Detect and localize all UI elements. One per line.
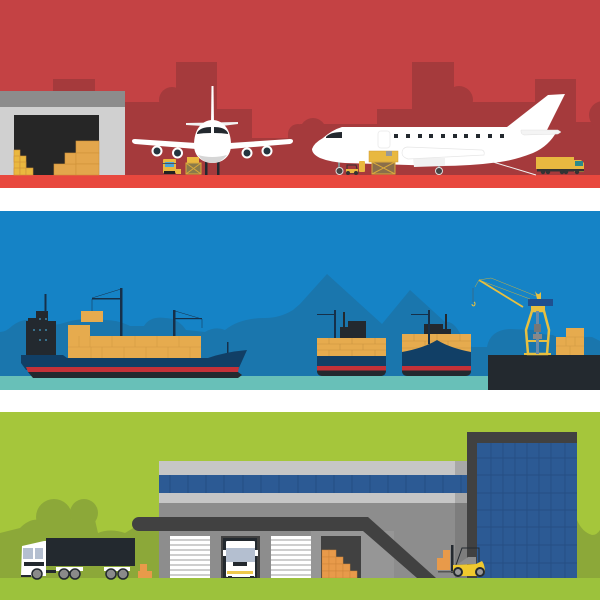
shutter door left [170, 536, 210, 578]
loading bay with truck [221, 536, 260, 579]
yellow delivery truck [536, 157, 584, 174]
ship cranes [92, 288, 202, 336]
canopy ramp [132, 517, 436, 578]
green bushes [0, 499, 600, 578]
semi truck [21, 538, 135, 579]
forklift at plane [346, 161, 365, 175]
container ship [21, 288, 247, 378]
airplane side view [312, 94, 565, 175]
cargo lift side [369, 151, 398, 174]
barge one [317, 310, 386, 376]
dock crane [472, 278, 553, 355]
mountains and hills [0, 274, 600, 376]
ship containers [68, 311, 201, 358]
shutter door right [271, 536, 311, 578]
hangar [0, 91, 125, 175]
loading bay with boxes [321, 536, 361, 578]
panel: sea freight [0, 211, 600, 390]
warehouse window band [159, 475, 467, 493]
water [0, 376, 600, 390]
red city skyline [53, 62, 600, 176]
small orange boxes [138, 564, 152, 578]
red ground strip [0, 175, 600, 188]
warehouse forklift [437, 545, 485, 576]
dock cargo boxes [556, 328, 584, 355]
barge two [402, 310, 471, 376]
airplane windows [394, 134, 504, 138]
ground strip [0, 578, 600, 600]
airplane front view [132, 86, 293, 175]
cargo lift front [186, 157, 201, 174]
dock [488, 355, 600, 390]
ship superstructure [26, 294, 56, 355]
small yellow cargo truck [162, 159, 181, 174]
warehouse building [159, 461, 467, 578]
hangar cargo boxes [14, 141, 99, 175]
panel: warehouse logistics [0, 412, 600, 600]
panel: air freight [0, 0, 600, 188]
office tower [467, 432, 577, 578]
